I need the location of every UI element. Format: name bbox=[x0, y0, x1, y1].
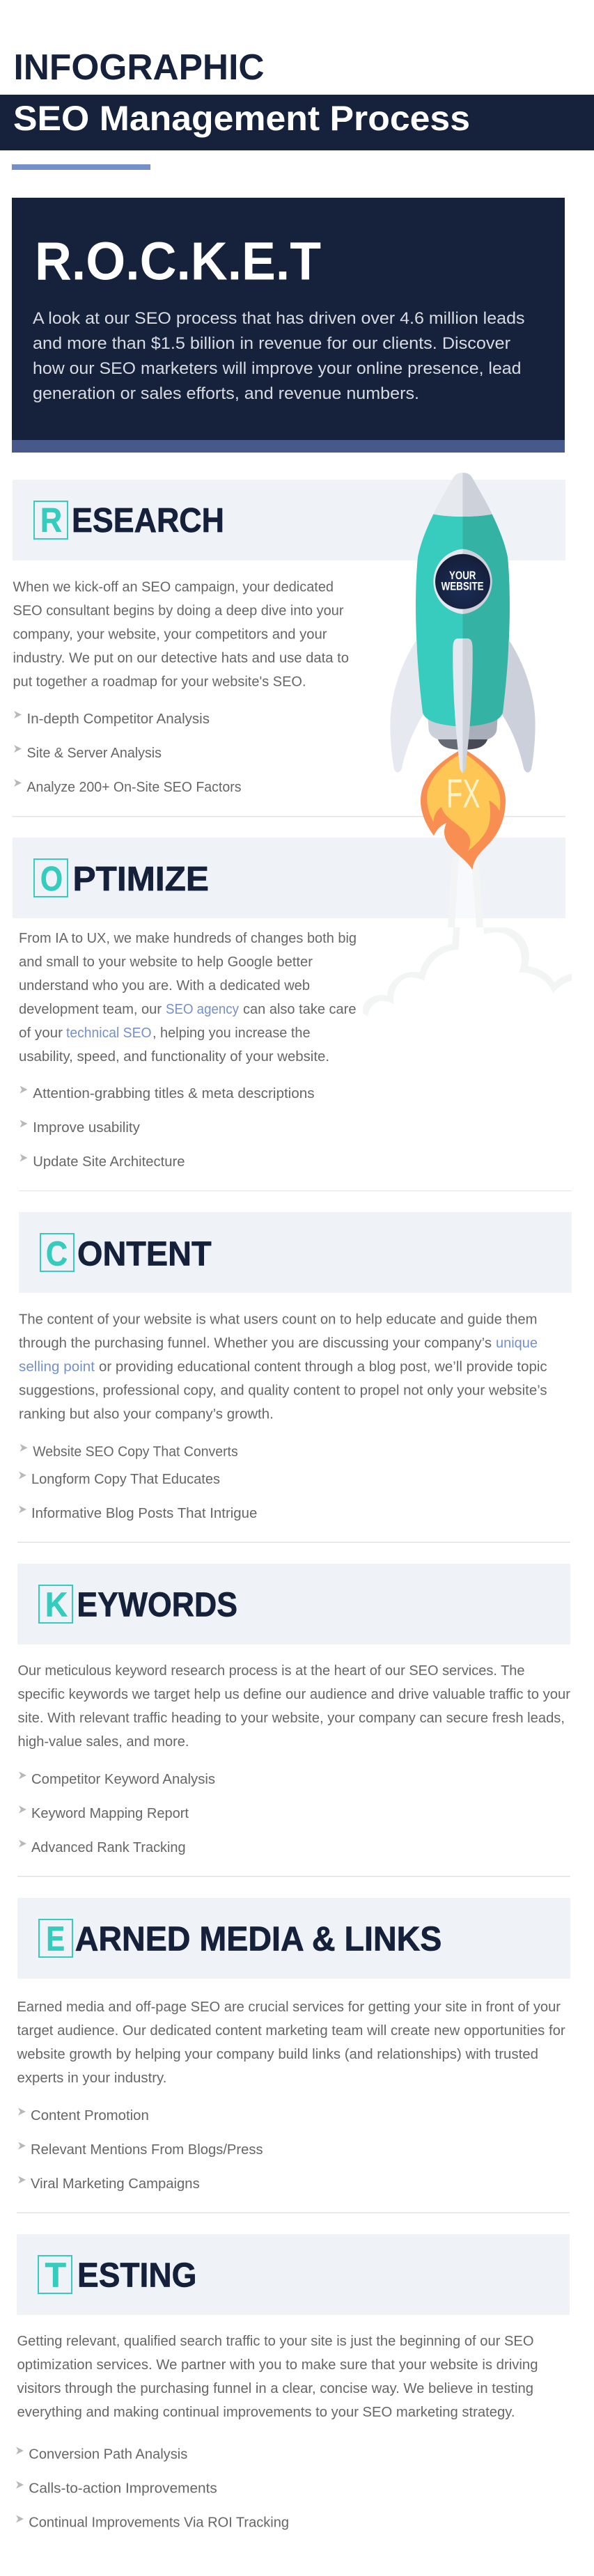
earned media text: experts in your industry. bbox=[17, 2071, 166, 2086]
optimize heading: O bbox=[40, 861, 63, 898]
content list: Website SEO Copy That Converts bbox=[33, 1444, 238, 1459]
keywords text: high-value sales, and more. bbox=[18, 1734, 189, 1750]
intro text bbox=[33, 309, 525, 403]
testing list: Conversion Path Analysis bbox=[29, 2447, 187, 2463]
title band: SEO Management Process bbox=[0, 95, 594, 150]
keywords heading bbox=[17, 1564, 570, 1644]
keywords text: specific keywords we target help us define our audience and drive valuable traffic to your bbox=[18, 1687, 570, 1702]
earned media list bbox=[18, 2108, 263, 2192]
rocket flame bbox=[421, 751, 506, 870]
keywords text: Our meticulous keyword research process is at the heart of our SEO services. The bbox=[18, 1663, 525, 1679]
title band: SEO Management Process: SEO Management Process bbox=[13, 99, 470, 138]
panel: research bbox=[13, 480, 565, 795]
research heading: ESEARCH bbox=[72, 502, 224, 540]
optimize text bbox=[19, 931, 357, 1065]
content text: or providing educational content through a blog post, we’ll provide topic bbox=[99, 1359, 547, 1374]
research list: Analyze 200+ On-Site SEO Factors bbox=[26, 780, 241, 795]
testing heading: T bbox=[45, 2257, 66, 2295]
keywords list: Keyword Mapping Report bbox=[31, 1806, 189, 1821]
intro text: A look at our SEO process that has driven over 4.6 million leads bbox=[33, 309, 525, 328]
rocket window: your website bbox=[433, 549, 492, 614]
rocket body bbox=[416, 514, 510, 727]
research text bbox=[13, 579, 349, 689]
testing list: Continual Improvements Via ROI Tracking bbox=[29, 2515, 289, 2531]
research text: company, your website, your competitors and your bbox=[13, 627, 327, 642]
optimize text: understand who you are. With a dedicated web bbox=[19, 978, 310, 994]
content text: unique bbox=[496, 1335, 538, 1351]
testing list bbox=[16, 2447, 289, 2531]
research heading bbox=[13, 480, 565, 560]
content heading: C bbox=[46, 1235, 68, 1273]
rocket window: your website: WEBSITE bbox=[441, 579, 484, 593]
content text: selling point bbox=[19, 1359, 95, 1374]
earned media text: website growth by helping your company build links (and relationships) with trusted bbox=[16, 2047, 538, 2062]
content text: The content of your website is what users count on to help educate and guide them bbox=[19, 1312, 538, 1327]
rocket nose bbox=[433, 473, 492, 517]
content text: through the purchasing funnel. Whether you are discussing your company’s bbox=[19, 1335, 492, 1351]
testing text: everything and making continual improvements to your SEO marketing strategy. bbox=[17, 2405, 515, 2420]
research text: put together a roadmap for your website's SEO. bbox=[13, 674, 306, 689]
testing text bbox=[17, 2334, 538, 2420]
title: INFOGRAPHIC: INFOGRAPHIC bbox=[14, 47, 265, 88]
research list bbox=[14, 711, 241, 795]
keywords list: Advanced Rank Tracking bbox=[31, 1840, 186, 1855]
panel: keywords bbox=[17, 1564, 570, 1855]
optimize text: , helping you increase the bbox=[153, 1026, 311, 1041]
earned media list: Relevant Mentions From Blogs/Press bbox=[31, 2142, 263, 2158]
rocket fins bbox=[390, 641, 536, 773]
keywords heading: K bbox=[45, 1587, 68, 1624]
earned media text bbox=[16, 2000, 565, 2086]
intro text: how our SEO marketers will improve your online presence, lead bbox=[33, 359, 521, 378]
testing text: Getting relevant, qualified search traffic to your site is just the beginning of our SEO bbox=[17, 2334, 533, 2349]
keywords heading: EYWORDS bbox=[77, 1587, 237, 1624]
content list bbox=[19, 1444, 257, 1521]
keywords list bbox=[19, 1771, 215, 1855]
optimize text: usability, speed, and functionality of your website. bbox=[19, 1049, 329, 1065]
testing text: optimization services. We partner with you to make sure that your website is driving bbox=[17, 2357, 538, 2373]
optimize list: Attention-grabbing titles & meta descriptions bbox=[33, 1086, 315, 1101]
panel: content bbox=[19, 1212, 572, 1521]
research list: In-depth Competitor Analysis bbox=[26, 712, 210, 727]
testing heading: ESTING bbox=[77, 2257, 196, 2295]
optimize text: and small to your website to help Google better bbox=[19, 955, 313, 970]
optimize list: Update Site Architecture bbox=[33, 1154, 185, 1170]
optimize list: Improve usability bbox=[33, 1120, 140, 1136]
content list: Informative Blog Posts That Intrigue bbox=[31, 1506, 257, 1521]
content list: Longform Copy That Educates bbox=[31, 1472, 220, 1487]
keywords text bbox=[18, 1663, 570, 1750]
optimize list bbox=[19, 1086, 315, 1170]
smoke cloud bbox=[363, 856, 572, 1016]
research list: Site & Server Analysis bbox=[26, 746, 162, 761]
earned media list: Content Promotion bbox=[31, 2108, 149, 2123]
keywords list: Competitor Keyword Analysis bbox=[31, 1772, 215, 1787]
optimize text: development team, our bbox=[19, 1002, 162, 1017]
testing text: visitors through the purchasing funnel in a clear, concise way. We believe in testing bbox=[17, 2381, 533, 2396]
content heading: ONTENT bbox=[77, 1235, 212, 1273]
earned media heading: ARNED MEDIA & LINKS bbox=[75, 1921, 441, 1958]
rocket nozzle bbox=[428, 719, 497, 750]
optimize heading: PTIMIZE bbox=[72, 861, 209, 898]
earned media list: Viral Marketing Campaigns bbox=[31, 2176, 200, 2192]
optimize heading bbox=[13, 838, 565, 918]
content text bbox=[19, 1312, 547, 1422]
content heading bbox=[19, 1212, 572, 1293]
optimize text: of your bbox=[19, 1026, 63, 1041]
research text: industry. We put on our detective hats and use data to bbox=[13, 650, 349, 666]
optimize text: From IA to UX, we make hundreds of changes both big bbox=[19, 931, 357, 946]
rocket bbox=[390, 473, 536, 870]
intro text: generation or sales efforts, and revenue numbers. bbox=[33, 384, 419, 403]
rocket center fin bbox=[453, 638, 473, 773]
earned media heading: E bbox=[46, 1921, 65, 1958]
research heading: R bbox=[40, 502, 62, 540]
rocket window: your website: YOUR bbox=[449, 569, 476, 582]
panel: intro R.O.C.K.E.T bbox=[12, 198, 565, 453]
testing list: Calls-to-action Improvements bbox=[29, 2481, 217, 2497]
intro heading: R.O.C.K.E.T bbox=[35, 231, 321, 291]
intro text: and more than $1.5 billion in revenue for our clients. Discover bbox=[33, 334, 510, 353]
accent bar bbox=[12, 164, 150, 170]
research text: When we kick-off an SEO campaign, your dedicated bbox=[13, 579, 334, 595]
keywords text: site. With relevant traffic heading to your website, your company can secure fresh leads, bbox=[18, 1711, 565, 1726]
panel: earned media and links bbox=[16, 1898, 570, 2192]
earned media text: Earned media and off-page SEO are crucial services for getting your site in front of your bbox=[17, 2000, 561, 2015]
earned media heading bbox=[17, 1898, 570, 1979]
optimize text: technical SEO bbox=[66, 1026, 152, 1041]
optimize text: can also take care bbox=[243, 1002, 357, 1017]
flame label FX: FX bbox=[446, 771, 480, 817]
optimize text: SEO agency bbox=[166, 1002, 239, 1017]
earned media text: target audience. Our dedicated content marketing team will create new opportunities for bbox=[17, 2023, 565, 2039]
content text: suggestions, professional copy, and quality content to propel not only your website’s bbox=[19, 1383, 547, 1398]
content text: ranking but also your company’s growth. bbox=[19, 1406, 274, 1422]
research text: SEO consultant begins by doing a deep dive into your bbox=[13, 603, 344, 618]
testing heading bbox=[17, 2234, 570, 2315]
panel: testing bbox=[16, 2234, 570, 2531]
panel: optimize bbox=[13, 838, 565, 1170]
